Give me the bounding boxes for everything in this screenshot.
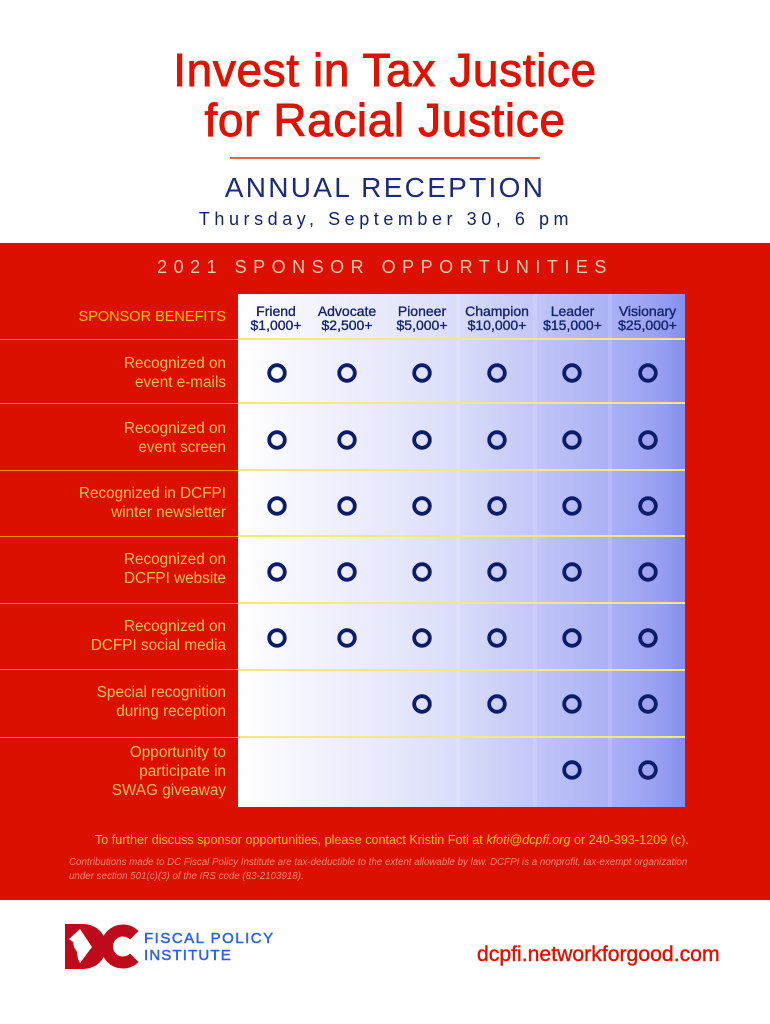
row label: swag giveaway bbox=[112, 744, 226, 799]
markers row 5 bbox=[269, 630, 656, 646]
tier: pioneer: Pioneer bbox=[398, 302, 446, 318]
row label: swag giveaway: Opportunity to bbox=[130, 744, 226, 761]
logo wordmark: INSTITUTE bbox=[144, 947, 232, 964]
legal note bbox=[69, 857, 687, 882]
title: Invest in Tax Justice bbox=[173, 44, 597, 96]
title bbox=[173, 44, 597, 146]
row label: social media bbox=[91, 618, 226, 654]
subtitle: annual reception: ANNUAL RECEPTION bbox=[225, 172, 545, 203]
tier headers bbox=[250, 302, 677, 333]
markers row 1 bbox=[269, 365, 656, 381]
row label: website: DCFPI website bbox=[124, 570, 226, 587]
tier: leader: Leader bbox=[551, 302, 594, 318]
tier: friend: Friend bbox=[256, 302, 296, 318]
logo: DC Fiscal Policy Institute bbox=[65, 924, 275, 969]
tier: friend bbox=[250, 302, 302, 333]
tier: advocate: Advocate bbox=[318, 302, 376, 318]
benefit markers bbox=[267, 363, 658, 780]
title: for Racial Justice bbox=[204, 94, 566, 146]
logo wordmark: FISCAL POLICY bbox=[144, 930, 275, 947]
row label: special recognition bbox=[97, 684, 226, 720]
tier: advocate: $2,500+ bbox=[322, 317, 372, 333]
legal note: Contributions made to DC Fiscal Policy Institute are tax-deductible to the extent allowable by law. DCFPI is a nonprofit, tax-exempt organization bbox=[69, 857, 687, 868]
section heading: 2021 SPONSOR OPPORTUNITIES bbox=[157, 257, 613, 277]
tier: champion: $10,000+ bbox=[468, 317, 526, 333]
row label: special recognition: Special recognition bbox=[97, 684, 226, 701]
row label: event screen bbox=[124, 420, 226, 456]
row label: website: Recognized on bbox=[124, 551, 226, 568]
legal note: under section 501(c)(3) of the IRS code (83-2103918). bbox=[69, 870, 304, 882]
row label: website bbox=[124, 551, 226, 587]
row label: event screen: event screen bbox=[138, 439, 226, 456]
panel: sponsor opportunities bbox=[0, 243, 770, 900]
tier: champion: Champion bbox=[465, 302, 529, 318]
contact line: To further discuss sponsor opportunities, please contact Kristin Foti at kfoti@dcpfi.org or 240-393-1209 (c). bbox=[95, 833, 689, 847]
row label: event e-mails: Recognized on bbox=[124, 355, 226, 372]
tier: leader bbox=[543, 302, 602, 333]
row label: swag giveaway: SWAG giveaway bbox=[112, 782, 226, 799]
markers row 4 bbox=[269, 564, 656, 580]
row label: social media: Recognized on bbox=[124, 618, 226, 635]
logo wordmark bbox=[144, 930, 275, 964]
event date: Thursday, September 30, 6 pm bbox=[199, 209, 573, 229]
markers row 6 bbox=[414, 696, 656, 712]
row label: special recognition: during reception bbox=[116, 703, 226, 720]
tier: visionary bbox=[618, 302, 677, 333]
row label: social media: DCFPI social media bbox=[91, 637, 226, 654]
markers row 3 bbox=[269, 498, 656, 514]
row label: event e-mails bbox=[124, 355, 226, 391]
icon: DC monogram bbox=[65, 924, 138, 969]
tier: pioneer: $5,000+ bbox=[396, 317, 448, 333]
row label: winter newsletter bbox=[79, 485, 226, 521]
row label: event screen: Recognized on bbox=[124, 420, 226, 437]
tier: friend: $1,000+ bbox=[250, 317, 302, 333]
tier: advocate bbox=[318, 302, 376, 333]
markers row 2 bbox=[269, 432, 656, 448]
donation url: dcpfi.networkforgood.com bbox=[477, 943, 720, 966]
row label: winter newsletter: winter newsletter bbox=[111, 504, 226, 521]
tier: pioneer bbox=[396, 302, 448, 333]
row label: winter newsletter: Recognized in DCFPI bbox=[79, 485, 226, 502]
panel: benefits table bbox=[238, 294, 685, 807]
tier: champion bbox=[465, 302, 529, 333]
row label: swag giveaway: participate in bbox=[139, 763, 226, 780]
tier: visionary: Visionary bbox=[619, 302, 676, 318]
markers row 7 bbox=[564, 762, 656, 778]
tier: leader: $15,000+ bbox=[543, 317, 602, 333]
title underline bbox=[230, 157, 540, 158]
tier: visionary: $25,000+ bbox=[618, 317, 677, 333]
row label: event e-mails: event e-mails bbox=[135, 374, 226, 391]
benefits column heading: SPONSOR BENEFITS bbox=[79, 309, 226, 325]
